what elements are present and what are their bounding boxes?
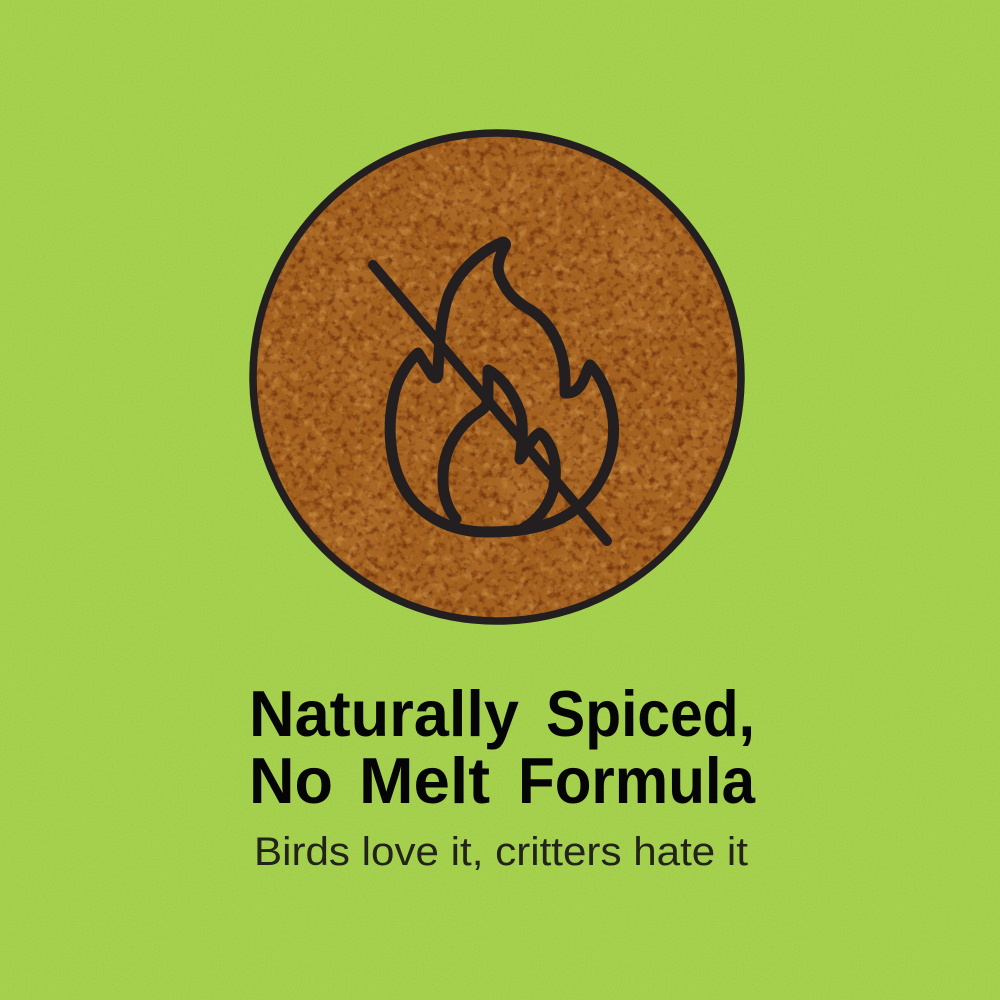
subtitle: Birds love it, critters hate it: [254, 830, 748, 874]
disc texture: [250, 130, 744, 624]
outer flame: [390, 242, 614, 532]
disc outline: [253, 133, 741, 621]
title: Naturally: [249, 677, 519, 750]
textured spice disc with icon: [250, 130, 744, 624]
title: Spiced,: [546, 677, 755, 750]
icon: crossed-out flame: [373, 242, 614, 541]
title: [249, 677, 756, 817]
inner flame: [443, 370, 555, 529]
title: Melt: [359, 744, 490, 817]
title: No: [249, 744, 333, 817]
strike line: [373, 265, 607, 541]
title: Formula: [518, 744, 756, 817]
